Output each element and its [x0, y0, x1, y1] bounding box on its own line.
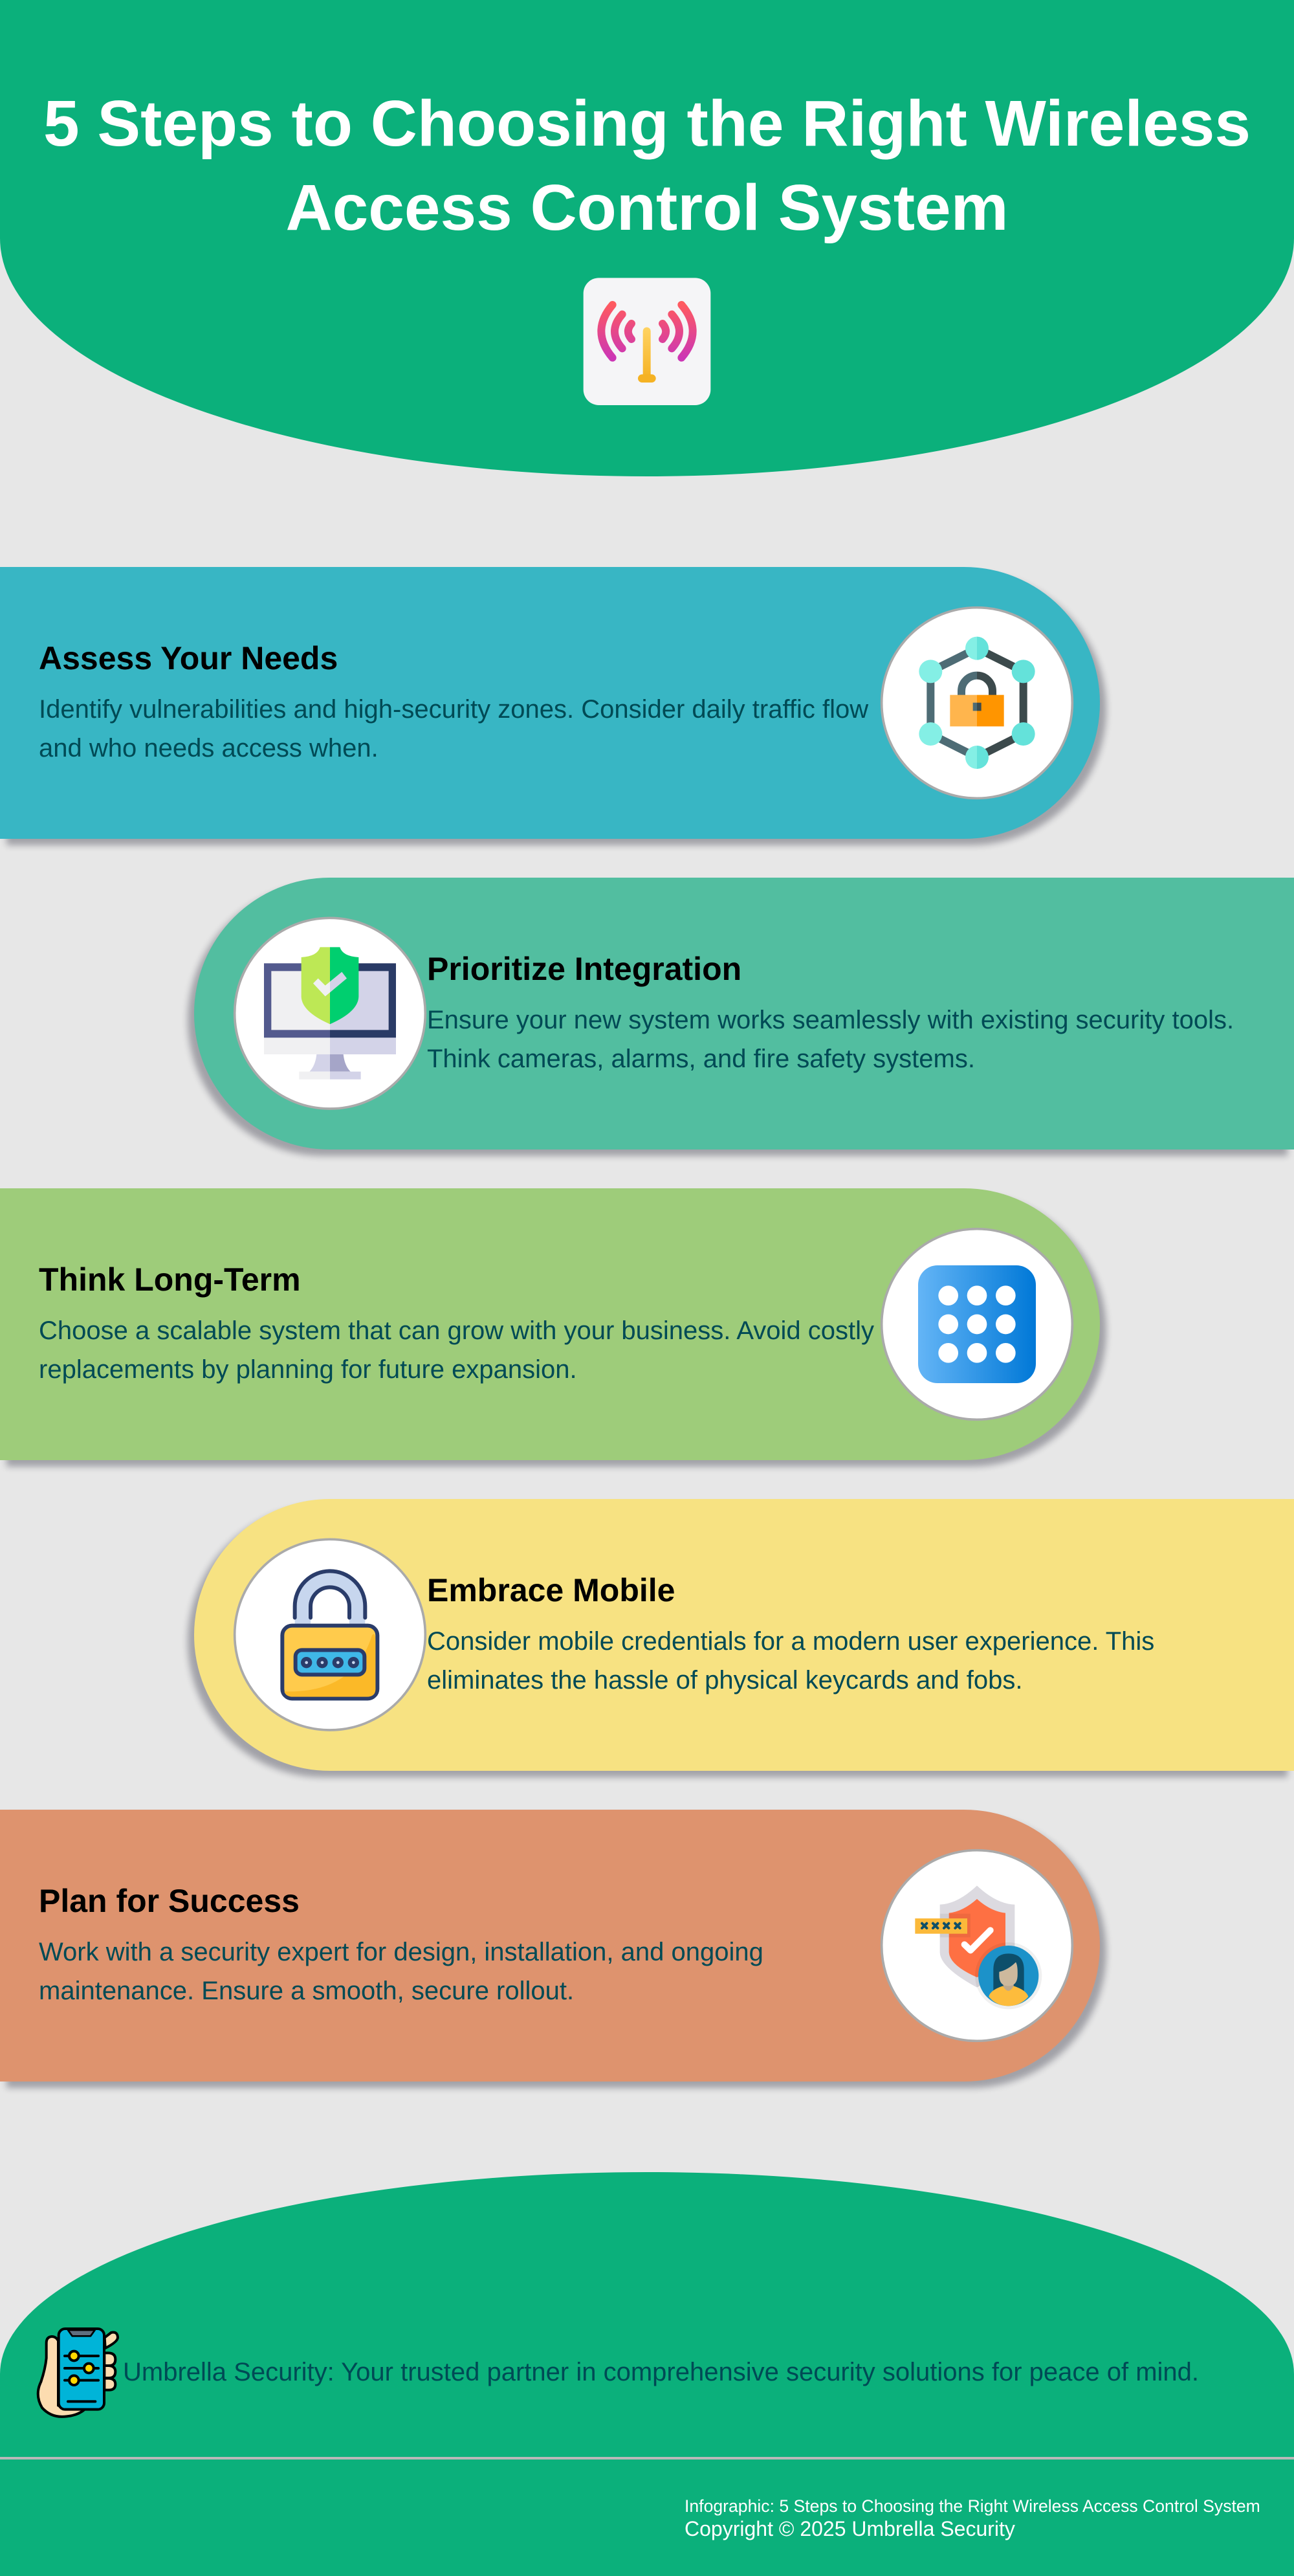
text: step 2 description — [427, 1006, 1234, 1073]
icon: network padlock — [880, 606, 1074, 800]
text: step 2 description: Ensure your new system works seamlessly with existing security tools. — [427, 1006, 1234, 1034]
heading: assess your needs: Assess Your Needs — [39, 640, 338, 676]
panel: step 3 think long-term — [0, 1188, 1100, 1460]
icon: combination padlock — [233, 1538, 427, 1731]
heading: prioritize integration: Prioritize Integration — [427, 951, 741, 987]
text: step 2 description: Think cameras, alarms, and fire safety systems. — [427, 1045, 975, 1073]
text: step 4 description: eliminates the hassle of physical keycards and fobs. — [427, 1666, 1022, 1694]
heading: think long-term: Think Long-Term — [39, 1261, 301, 1298]
panel: step 1 assess your needs — [0, 567, 1100, 839]
heading: embrace mobile: Embrace Mobile — [427, 1572, 675, 1608]
text: step 4 description — [427, 1627, 1154, 1694]
icon: hand holding phone — [36, 2327, 119, 2418]
text: step 5 description — [39, 1938, 763, 2005]
text: step 5 description: maintenance. Ensure a smooth, secure rollout. — [39, 1977, 574, 2005]
text: step 3 description — [39, 1316, 874, 1384]
text: copyright: Infographic: 5 Steps to Choosing the Right Wireless Access Control System — [685, 2496, 1260, 2516]
heading: plan for success: Plan for Success — [39, 1883, 300, 1919]
panel: step 4 embrace mobile — [194, 1499, 1294, 1771]
text: step 5 description: Work with a security expert for design, installation, and ongoing — [39, 1938, 763, 1966]
text: step 3 description: replacements by planning for future expansion. — [39, 1355, 577, 1384]
divider — [0, 2457, 1294, 2459]
text: umbrella security message: Umbrella Security: Your trusted partner in comprehensive security solutions for peace of mind. — [123, 2358, 1199, 2386]
title: Access Control System — [285, 172, 1009, 244]
icon: wireless antenna — [584, 278, 710, 405]
text: step 1 description: and who needs access when. — [39, 734, 378, 762]
icon: monitor with shield — [233, 916, 427, 1110]
header banner — [0, 0, 1294, 476]
title — [43, 87, 1251, 244]
text: step 1 description: Identify vulnerabilities and high-security zones. Consider daily traffic flow — [39, 695, 868, 724]
icon: blue keypad — [880, 1227, 1074, 1421]
text: step 4 description: Consider mobile credentials for a modern user experience. This — [427, 1627, 1154, 1656]
text: copyright — [685, 2496, 1260, 2540]
panel: step 5 plan for success — [0, 1810, 1100, 2082]
icon: shield with password and user — [880, 1849, 1074, 2043]
title: 5 Steps to Choosing the Right Wireless — [43, 87, 1251, 160]
text: copyright: Copyright © 2025 Umbrella Security — [685, 2517, 1015, 2540]
text: step 1 description — [39, 695, 868, 762]
text: step 3 description: Choose a scalable system that can grow with your business. Avoid costly — [39, 1316, 874, 1345]
footer banner — [0, 2172, 1294, 2576]
panel: step 2 prioritize integration — [194, 878, 1294, 1149]
